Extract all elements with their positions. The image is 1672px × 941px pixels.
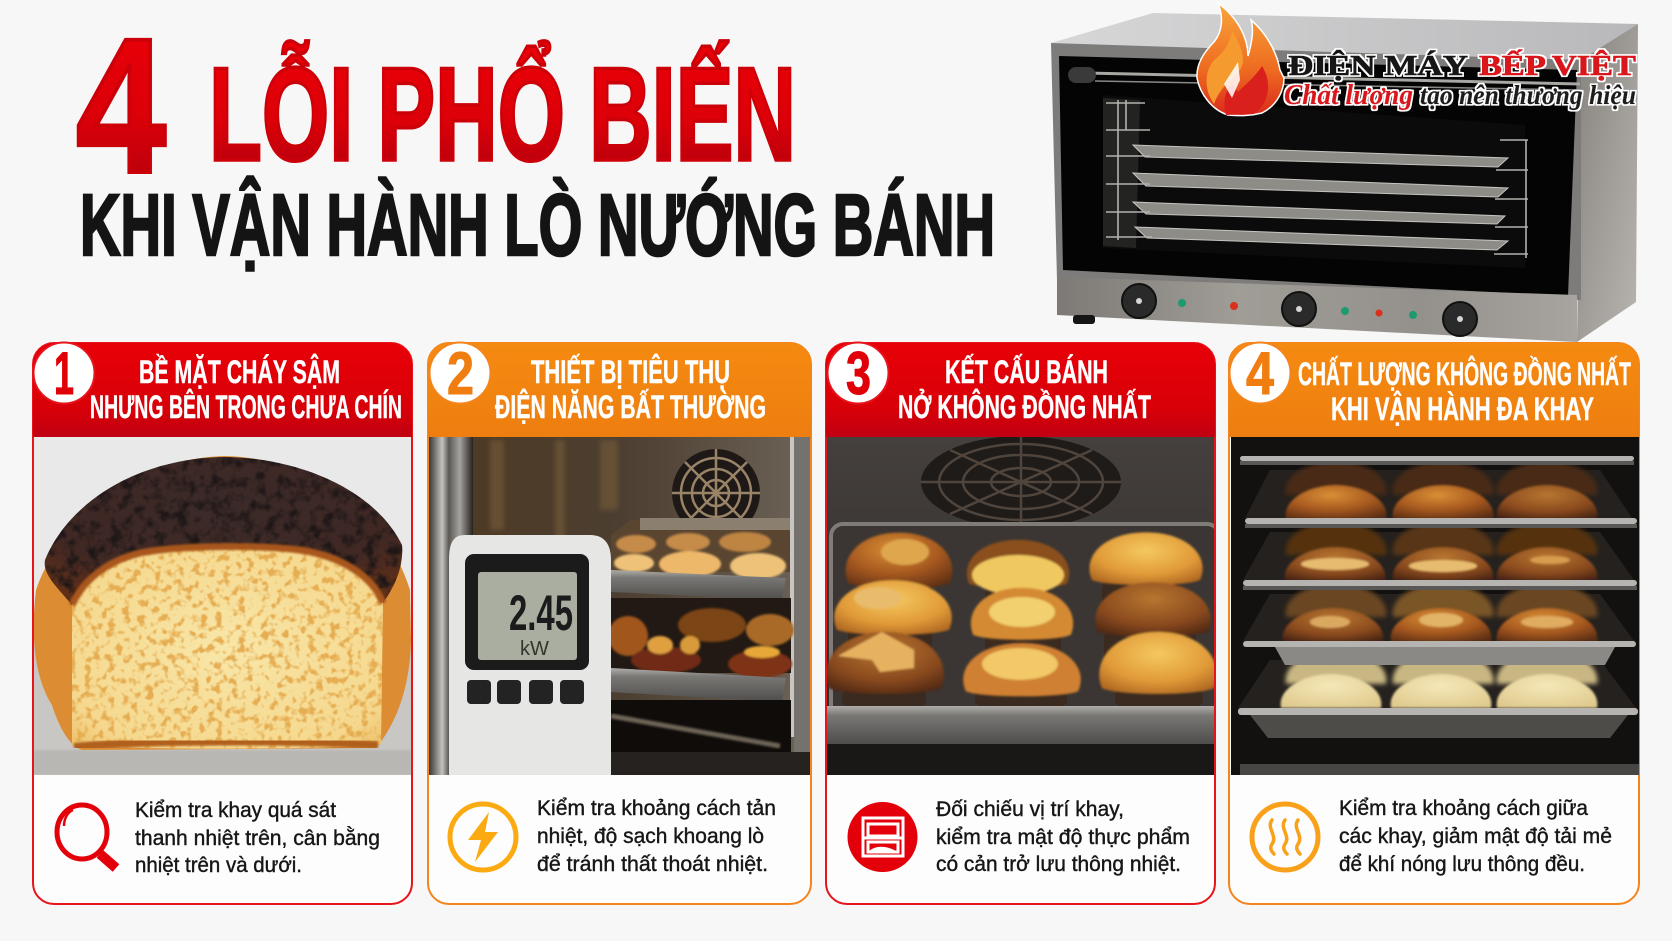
card 2 frame [428,343,811,904]
card 4 text [1339,797,1612,876]
card 3 text [936,798,1190,876]
card 1 text: thanh nhiệt trên, cân bằng [135,827,380,850]
card 1 number badge [34,340,94,407]
crumb [72,547,383,749]
card 2 text: nhiệt, độ sạch khoang lò [537,825,764,848]
icon: lightning bolt [450,804,516,870]
card 3 heading: KẾT CẤU BÁNH [945,354,1108,390]
card 2 heading: THIẾT BỊ TIÊU THỤ [531,354,730,390]
icon: magnifier [57,805,116,868]
baking tray [829,522,1214,706]
rows of muffins [1281,485,1597,708]
card 2 number badge [430,340,490,407]
meter reading: 2.45 [509,585,573,641]
title line 1: LỖI PHỔ BIẾN [209,40,796,189]
oven knobs [1122,284,1477,336]
logo brand: BẾP VIỆT [1479,48,1636,82]
card 4 frame [1229,343,1639,904]
card 4 number badge [1230,340,1290,407]
oven fan [672,449,760,518]
panel: card 1 burnt surface [30,340,415,904]
oven control strip [1057,277,1577,342]
card 1 text: nhiệt trên và dưới. [135,854,302,877]
card 1 number badge: 1 [54,340,74,407]
logo slogan black: tạo nên thương hiệu [1420,80,1636,110]
card 3 photo: uneven muffins [826,436,1219,775]
underside trays [1275,647,1615,665]
panel: card 4 inconsistent multi-tray [1229,340,1639,904]
oven wall reflections [490,440,618,540]
card 1 heading: NHƯNG BÊN TRONG CHƯA CHÍN [90,389,402,425]
card 4 text: Kiểm tra khoảng cách giữa [1339,797,1588,820]
tray rails [1238,456,1638,715]
panel: card 3 uneven rise [826,340,1219,904]
card 3 heading: NỞ KHÔNG ĐỒNG NHẤT [898,389,1151,425]
card 3 text: Đối chiếu vị trí khay, [936,798,1124,821]
card 1 heading [90,354,402,425]
card 2 heading: ĐIỆN NĂNG BẤT THƯỜNG [495,389,766,425]
card 4 number badge: 4 [1246,340,1275,407]
oven handle [1085,73,1580,84]
upper rolls [614,532,786,579]
card 4 photo: multi-tray rack [1231,437,1639,775]
muffin cups [842,580,1203,706]
oven fan [921,436,1121,528]
card 1 text: Kiểm tra khay quá sát [135,799,336,822]
power meter [449,535,611,775]
oven lights [1178,299,1417,319]
card 3 text: có cản trở lưu thông nhiệt. [936,853,1181,876]
card 3 frame [826,343,1215,904]
meter buttons [467,680,584,704]
icon: heat waves [1252,804,1318,870]
card 4 heading [1298,356,1631,427]
title line 2: KHI VẬN HÀNH LÒ NƯỚNG BÁNH [80,177,995,274]
logo slogan red: Chất lượng [1284,79,1413,111]
card 3 header [826,343,1215,437]
card 3 number badge: 3 [846,340,871,407]
card 3 heading [898,354,1151,425]
card 2 text [537,797,776,876]
card 1 header [33,343,412,437]
card 3 number badge [828,340,888,407]
icon: oven trays [848,802,918,872]
logo name: ĐIỆN MÁY [1288,49,1468,82]
card 2 photo: oven with power meter [429,437,810,775]
oven trays [1133,145,1508,250]
card 4 text: để khí nóng lưu thông đều. [1339,853,1585,876]
card 2 text: để tránh thất thoát nhiệt. [537,853,768,876]
logo [1197,3,1636,116]
burnt crust [45,457,402,605]
card 4 header [1229,343,1639,437]
card 3 text: kiểm tra mật độ thực phẩm [936,826,1190,849]
upper tray [611,520,790,572]
power meter: kW [520,638,549,660]
card 1 heading: BỀ MẶT CHÁY SẬM [139,354,340,390]
card 1 text [135,799,380,877]
card 2 header [428,343,811,437]
card 2 number badge: 2 [447,340,474,407]
meter screen [465,554,589,670]
panel: card 2 abnormal power use [428,340,811,904]
muffins [826,532,1217,696]
logo flame [1197,3,1284,116]
tray bodies [1238,470,1636,708]
card 1 frame [33,343,412,904]
card 1 photo: burnt loaf [30,437,415,780]
card 2 text: Kiểm tra khoảng cách tản [537,797,776,820]
back muffins [1286,461,1597,684]
title [76,0,995,274]
card 4 text: các khay, giảm mật độ tải mẻ [1339,825,1612,848]
title number 4: 4 [76,0,166,213]
lower muffins [608,608,794,678]
oven photo [1051,13,1638,342]
card 2 heading [495,354,766,425]
